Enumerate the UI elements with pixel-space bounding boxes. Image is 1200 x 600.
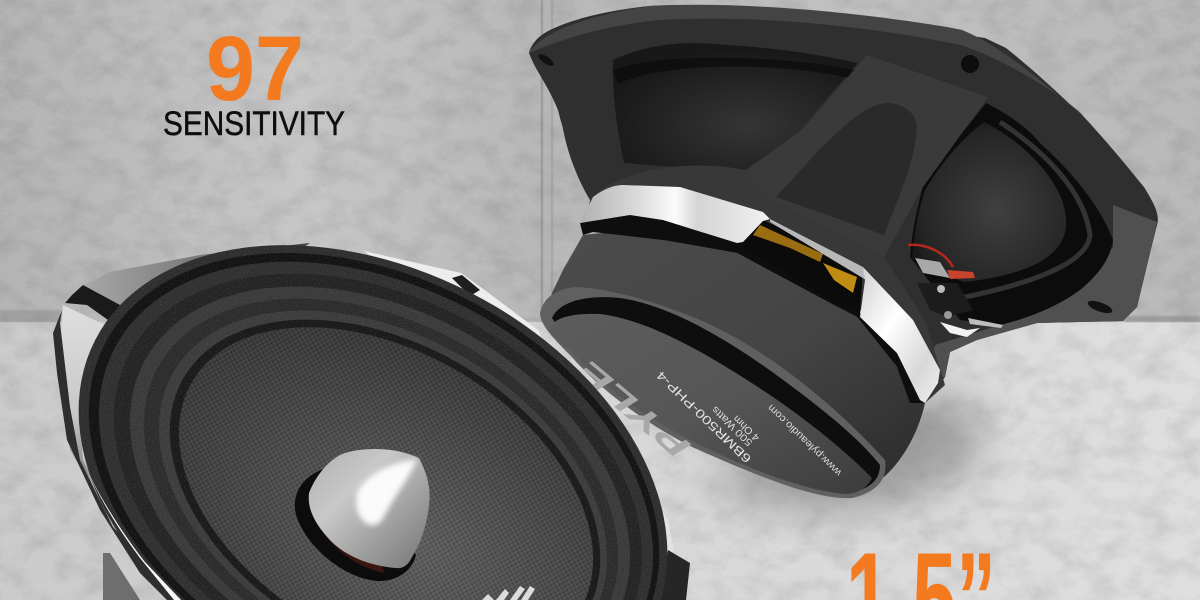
wall xyxy=(0,0,1200,322)
floor xyxy=(0,322,1200,600)
notch with amber reflection xyxy=(743,220,863,313)
magnet cylinder xyxy=(545,230,925,490)
rear speaker frame below xyxy=(103,553,140,600)
rear plate rim xyxy=(540,287,886,498)
rib recess xyxy=(776,103,917,235)
label sensitivity: SENSITIVITY xyxy=(163,105,345,143)
floor shadow xyxy=(700,395,981,510)
flange white lower right xyxy=(640,470,674,560)
dust cap xyxy=(295,449,430,581)
flange clip bottom-right xyxy=(660,550,690,600)
left basket rib xyxy=(560,55,612,200)
number 97: 97 xyxy=(206,18,304,120)
cap base ring xyxy=(295,468,416,581)
frame xyxy=(529,5,1158,403)
right cone xyxy=(912,122,1066,282)
flange clip top-right xyxy=(452,275,480,296)
ring gap xyxy=(580,215,925,403)
rear plate model text: 6BMR500-PHP-4 xyxy=(653,368,754,466)
silver ring xyxy=(580,185,940,403)
rear plate groove xyxy=(552,297,880,490)
left basket opening xyxy=(613,43,858,170)
flange white wedge xyxy=(58,305,115,525)
flange top mesh xyxy=(84,243,310,320)
wall seam xyxy=(541,0,553,322)
rear plate watts text: 500 Watts xyxy=(710,404,755,448)
mesh cone xyxy=(119,258,653,600)
flange white upper right xyxy=(364,251,560,380)
basket cone to ring xyxy=(585,165,945,403)
rear plate logo: PYLE xyxy=(571,352,696,465)
centre basket rib xyxy=(737,55,988,257)
cone logo xyxy=(482,586,535,600)
terminal and wires xyxy=(908,245,1003,337)
surround rolls xyxy=(79,246,667,600)
flange clip top-left xyxy=(65,285,120,320)
right surround bands xyxy=(960,122,1090,298)
speaker: rear view xyxy=(529,5,1158,498)
heading: 97 sensitivity xyxy=(163,18,345,143)
wall base shadow xyxy=(0,310,1200,322)
speaker: front view xyxy=(53,243,690,600)
rear plate disc xyxy=(549,314,872,494)
rear plate url text: www.pyleaudio.com xyxy=(766,402,845,479)
flange outer band and stripe xyxy=(53,310,181,600)
right basket opening xyxy=(910,103,1113,325)
rear plate ohm text: 4 Ohm xyxy=(731,413,762,443)
surround outer xyxy=(0,151,748,600)
cap dome xyxy=(309,449,430,568)
mounting holes xyxy=(537,52,1114,316)
frame lower right xyxy=(925,205,1157,380)
